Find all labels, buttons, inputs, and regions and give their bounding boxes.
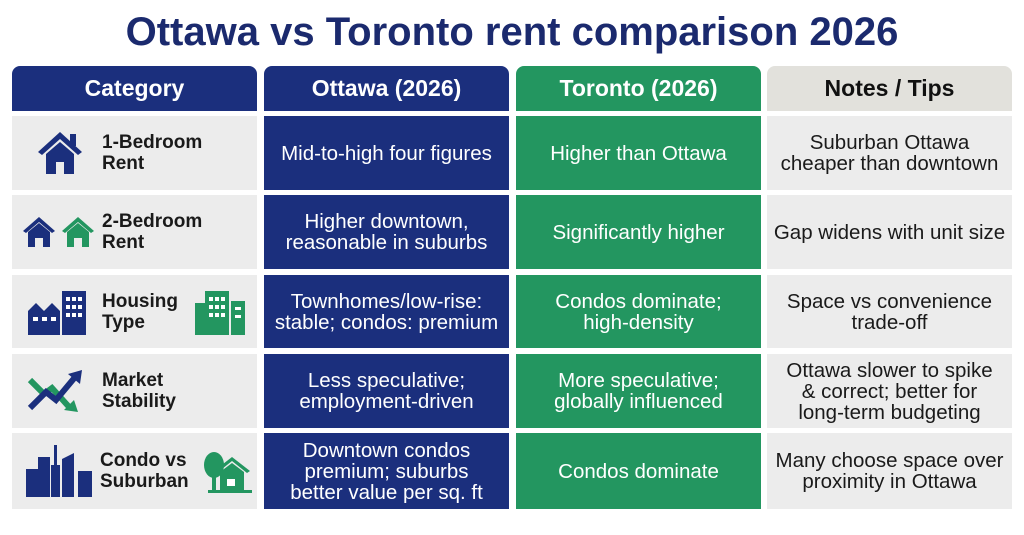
row 2 ottawa <box>264 195 509 269</box>
icon: buildings <box>28 291 86 335</box>
row 4 category: Stability <box>102 391 176 412</box>
row 1 category: Rent <box>102 153 144 174</box>
row 4 toronto: More speculative; <box>558 369 719 392</box>
row 3 ottawa: stable; condos: premium <box>275 310 498 334</box>
row 1 notes: cheaper than downtown <box>781 152 998 175</box>
icon: skyline <box>26 445 92 497</box>
row 5 notes <box>767 433 1012 509</box>
row 4 ottawa: Less speculative; <box>308 369 465 392</box>
header: notes: Notes / Tips <box>825 75 954 101</box>
row 3 toronto: Condos dominate; <box>555 290 722 312</box>
row 4 notes: Ottawa slower to spike <box>786 358 993 382</box>
row 2 ottawa: reasonable in suburbs <box>286 231 487 254</box>
row 3 category: Type <box>102 312 145 332</box>
row 5 ottawa: Downtown condos <box>303 438 470 462</box>
row 1 ottawa: Mid-to-high four figures <box>281 142 492 164</box>
row 3 notes <box>767 275 1012 348</box>
icon: tree house <box>204 452 252 493</box>
row 2 category: Rent <box>102 232 144 253</box>
icon: trend arrows <box>28 370 82 412</box>
row 4 notes: long-term budgeting <box>798 400 981 424</box>
row 4 category: Market <box>102 370 163 391</box>
row 1 ottawa <box>264 116 509 190</box>
icon: two houses <box>23 217 94 247</box>
row 3 ottawa <box>264 275 509 348</box>
row 1 toronto <box>516 116 761 190</box>
row 3 toronto <box>516 275 761 348</box>
header: ottawa: Ottawa (2026) <box>312 75 461 101</box>
row 4 ottawa <box>264 354 509 428</box>
icon: green towers <box>195 291 245 335</box>
row 5 category: Condo vs <box>100 450 187 471</box>
row 5 notes: Many choose space over <box>776 449 1003 472</box>
row 5 toronto: Condos dominate <box>558 460 719 482</box>
row 1 category <box>12 116 257 190</box>
row 1 toronto: Higher than Ottawa <box>550 142 727 164</box>
row 3 category <box>12 275 257 348</box>
row 1 notes <box>767 116 1012 190</box>
row 5 category: Suburban <box>100 471 189 492</box>
header: ottawa <box>264 66 509 111</box>
row 3 notes: trade-off <box>852 310 927 334</box>
header: toronto <box>516 66 761 111</box>
row 3 category: Housing <box>102 290 178 312</box>
row 5 ottawa: better value per sq. ft <box>290 480 483 504</box>
row 2 category: 2-Bedroom <box>102 211 202 232</box>
row 2 notes: Gap widens with unit size <box>774 220 1005 244</box>
row 3 notes: Space vs convenience <box>787 290 992 312</box>
row 5 category <box>12 433 257 509</box>
row 5 notes: proximity in Ottawa <box>802 470 977 493</box>
row 2 category <box>12 195 257 269</box>
row 1 notes: Suburban Ottawa <box>810 131 969 154</box>
icon: house <box>38 132 82 174</box>
row 5 toronto <box>516 433 761 509</box>
row 2 toronto: Significantly higher <box>552 220 725 244</box>
row 4 toronto <box>516 354 761 428</box>
row 2 notes <box>767 195 1012 269</box>
row 4 ottawa: employment-driven <box>299 390 474 413</box>
row 4 notes: & correct; better for <box>802 380 977 402</box>
row 5 ottawa: premium; suburbs <box>304 460 469 482</box>
row 2 toronto <box>516 195 761 269</box>
row 3 ottawa: Townhomes/low-rise: <box>291 290 482 312</box>
row 2 ottawa: Higher downtown, <box>304 210 469 233</box>
header: toronto: Toronto (2026) <box>559 75 718 101</box>
row 3 toronto: high-density <box>583 310 694 334</box>
row 4 notes <box>767 354 1012 428</box>
row 4 category <box>12 354 257 428</box>
title: Ottawa vs Toronto rent comparison 2026 <box>126 10 898 54</box>
header: category <box>12 66 257 111</box>
header: notes <box>767 66 1012 111</box>
row 5 ottawa <box>264 433 509 509</box>
row 1 category: 1-Bedroom <box>102 132 202 153</box>
header: category: Category <box>85 75 184 101</box>
row 4 toronto: globally influenced <box>554 390 723 413</box>
